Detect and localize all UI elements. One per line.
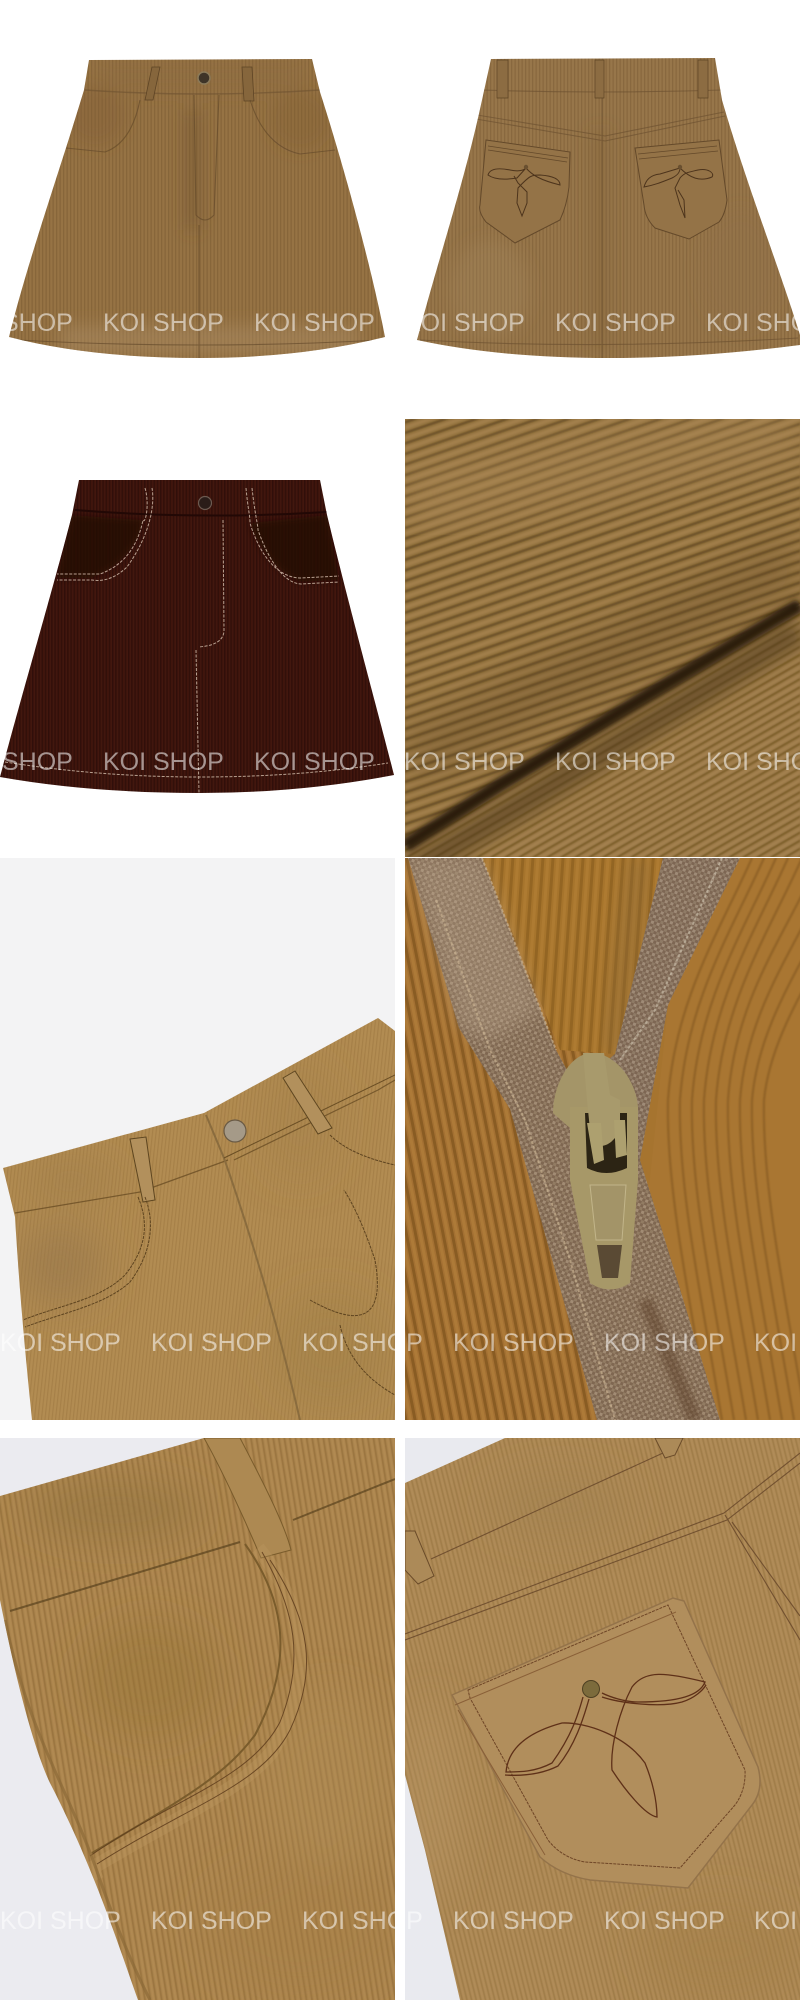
contrast stitching bbox=[5, 488, 388, 793]
side seam bbox=[5, 1620, 150, 2000]
waistband seam bbox=[10, 1479, 395, 1611]
panel: zipper close-up bbox=[405, 858, 800, 1420]
watermark text row 2: KOI SHOP bbox=[404, 748, 525, 776]
panel: dark brown skirt front view bbox=[0, 470, 395, 800]
pocket shadows bbox=[57, 515, 339, 582]
watermark text row 1 bbox=[0, 309, 800, 337]
watermark text row 2 bbox=[0, 748, 800, 776]
pocket bbox=[452, 1598, 760, 1888]
pocket stitching bbox=[468, 1605, 745, 1868]
corduroy right bbox=[638, 858, 800, 1420]
panel: tan skirt back view bbox=[405, 50, 800, 365]
watermark text row 3: KOI SHOP bbox=[604, 1329, 725, 1357]
upper fold bbox=[405, 419, 800, 857]
watermark text row 3: KOI SHOP bbox=[0, 1329, 121, 1357]
watermark text row 1: KOI SHOP bbox=[404, 309, 525, 337]
slider tab bbox=[583, 1053, 620, 1146]
waistband and yoke bbox=[420, 60, 798, 358]
pocket embroidery bbox=[644, 168, 713, 218]
watermark text row 4: KOI SHOP bbox=[0, 1907, 121, 1935]
pull frame bbox=[570, 1107, 638, 1290]
watermark text row 3: KOI SHOP bbox=[151, 1329, 272, 1357]
pockets and fly stitching bbox=[18, 95, 380, 358]
left zipper tape bbox=[408, 858, 720, 1420]
belt loops bbox=[145, 67, 254, 101]
belt loops bbox=[497, 60, 708, 98]
watermark text row 1: KOI SHOP bbox=[254, 309, 375, 337]
button bbox=[198, 496, 212, 510]
placket bbox=[206, 1115, 300, 1420]
right zipper tape bbox=[610, 858, 740, 1160]
watermark text row 3 bbox=[0, 1329, 800, 1357]
panel: back pocket close-up bbox=[400, 1438, 800, 2000]
corduroy centre bbox=[484, 858, 605, 1053]
pull plate bbox=[590, 1185, 626, 1240]
shading bbox=[60, 60, 360, 355]
shading bbox=[16, 1226, 360, 1370]
waistband bbox=[75, 510, 327, 516]
lower zipper shadow bbox=[645, 1300, 695, 1420]
waist seams bbox=[405, 1453, 800, 1640]
pocket stitching bbox=[23, 1135, 395, 1395]
panel: corduroy fabric close-up bbox=[405, 419, 800, 875]
slider dome bbox=[553, 1053, 638, 1128]
left back pocket bbox=[480, 140, 570, 243]
watermark text row 2: KOI SHOP bbox=[103, 748, 224, 776]
shading bbox=[25, 1482, 400, 2000]
watermark text row 3: KOI SHOP bbox=[302, 1329, 423, 1357]
pull hole bbox=[597, 1245, 622, 1278]
watermark text row 2: KOI SHOP bbox=[555, 748, 676, 776]
panel: side pocket close-up bbox=[0, 1438, 400, 2000]
watermark text row 4: KOI SHOP bbox=[302, 1907, 423, 1935]
watermark text row 3: KOI SHOP bbox=[453, 1329, 574, 1357]
panel: waistband close-up with button bbox=[0, 858, 395, 1420]
belt loops bbox=[130, 1071, 332, 1202]
slider legs bbox=[587, 1120, 627, 1164]
corduroy left bbox=[405, 858, 605, 1420]
embroidery bbox=[506, 1674, 705, 1817]
belt loop bbox=[204, 1438, 291, 1558]
waistband bbox=[85, 90, 320, 94]
shadow bbox=[770, 1150, 790, 1420]
slot bbox=[585, 1113, 627, 1173]
lower fold bbox=[405, 614, 800, 857]
shading bbox=[400, 1475, 800, 2000]
panel: tan skirt front view bbox=[0, 50, 395, 365]
dark crease bbox=[405, 605, 800, 846]
waistband seam bbox=[15, 1080, 395, 1213]
watermark text row 4 bbox=[0, 1907, 800, 1935]
zipper puller bbox=[553, 1053, 638, 1290]
pocket embroidery bbox=[488, 168, 560, 216]
rivet bbox=[582, 1680, 600, 1698]
watermark text row 2: KOI SHOP bbox=[254, 748, 375, 776]
pocket edge bbox=[92, 1544, 280, 1853]
watermark text row 4: KOI SHOP bbox=[604, 1907, 725, 1935]
right back pocket bbox=[635, 140, 727, 239]
button bbox=[224, 1120, 246, 1142]
watermark text row 1: KOI SHOP bbox=[555, 309, 676, 337]
watermark text row 4: KOI SHOP bbox=[151, 1907, 272, 1935]
watermark text row 4: KOI SHOP bbox=[453, 1907, 574, 1935]
watermark text row 1: KOI SHOP bbox=[103, 309, 224, 337]
belt loops bbox=[405, 1438, 683, 1584]
button bbox=[198, 72, 210, 84]
shading bbox=[462, 229, 777, 328]
